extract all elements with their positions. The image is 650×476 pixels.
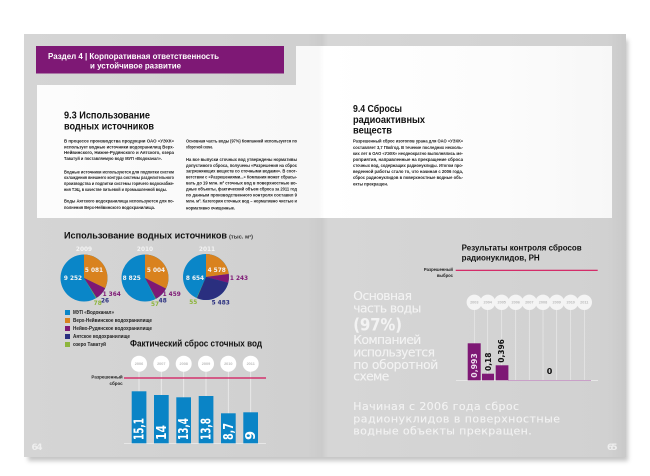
radionuclide bar chart: 2008 <box>539 301 547 305</box>
radionuclide chart heading: Результаты контроля сбросов <box>462 244 582 253</box>
text column 1: Водные источники используются для подпитки систем <box>64 169 174 174</box>
radionuclide bar chart: 0,18 <box>484 352 493 371</box>
wastewater bar chart: 13,8 <box>200 418 214 440</box>
heading 9.3: 9.3 Использование <box>64 110 150 122</box>
text column 1: производства и подпитки системы горячего водоснабже- <box>64 180 174 186</box>
pie legend: Нейво-Рудянское водохранилище <box>73 325 152 332</box>
text column 1 <box>64 139 174 210</box>
radionuclide bar chart: 0,993 <box>470 353 479 378</box>
white top panel <box>37 46 612 218</box>
radionuclide bar chart <box>424 267 598 380</box>
pie chart 2010: 8 825 <box>123 276 141 282</box>
text column 2: вать до 19 млн. м³ сточных вод в поверхностные во- <box>186 181 297 186</box>
pie chart 2010: 48 <box>159 299 167 305</box>
pie chart 2011 <box>183 247 248 306</box>
text column 1: использует водные источники водохранилищ Верх- <box>64 144 174 149</box>
callout: discharge stopped: Начиная с 2006 года сброс <box>353 400 519 413</box>
radionuclide bar chart: 2011 <box>580 301 588 305</box>
wastewater bar chart: 2007 <box>157 362 166 366</box>
water sources heading: Использование водных источников <box>64 230 227 242</box>
callout: discharge stopped: радионуклидов в поверхностные <box>353 412 560 425</box>
wastewater bar chart: 9 <box>244 431 259 440</box>
callout: discharge stopped <box>353 400 560 437</box>
text column 2: допустимого сброса, получены «Разрешения на сброс <box>186 162 297 168</box>
title banner: и устойчивое развитие <box>90 60 181 70</box>
radionuclide bar chart: 2004 <box>483 301 493 305</box>
text 9.4: сточных вод, содержащих радионуклиды. Итогом про- <box>353 163 463 168</box>
pie chart 2009: 1 364 <box>103 292 121 298</box>
heading 9.3 <box>64 110 154 132</box>
callout: 97 percent <box>353 289 438 384</box>
wastewater bar chart: 2008 <box>179 362 188 366</box>
page number 65: 65 <box>607 443 618 453</box>
pie legend: МУП «Водоканал» <box>73 310 114 316</box>
radionuclide bar chart: 2005 <box>497 301 506 305</box>
callout: 97 percent: используется <box>353 345 435 359</box>
pie chart 2011: 5 483 <box>212 300 230 306</box>
callout: 97 percent: (97%) <box>353 316 402 336</box>
text column 1: Нейвинского, Нижне-Рудянского и Аятского, озера <box>64 149 174 155</box>
heading 9.3: водных источников <box>64 122 154 132</box>
wastewater bar chart: Разрешенный <box>91 374 123 380</box>
pie chart 2009 <box>60 247 121 307</box>
wastewater bar chart: 2006 <box>135 362 143 366</box>
radionuclide bar chart: выброс <box>437 273 454 278</box>
radionuclide bar chart: 2010 <box>566 301 575 305</box>
pie chart 2010: 1 459 <box>163 292 181 298</box>
pie chart 2009: 26 <box>101 299 109 305</box>
wastewater bar chart: сброс <box>110 380 123 386</box>
heading 9.4: 9.4 Сбросы <box>353 103 402 115</box>
pie chart 2009: 2009 <box>76 247 92 253</box>
wastewater bar chart: 14 <box>155 425 170 440</box>
title banner: Раздел 4 | Корпоративная ответственность <box>48 51 219 61</box>
callout: 97 percent: часть воды <box>353 302 421 316</box>
radionuclide bar chart: 2009 <box>552 301 561 305</box>
wastewater bar chart <box>91 356 266 444</box>
pie chart 2009: 5 081 <box>85 268 103 274</box>
wastewater bar chart: 2009 <box>202 362 210 366</box>
text 9.4: составляет 3,7 ГБк/год. В течение последних несколь- <box>353 145 463 150</box>
callout: 97 percent: Основная <box>353 289 412 303</box>
text column 1: охлаждения внешнего контура системы разделительного <box>64 175 174 180</box>
pie chart 2010: 5 004 <box>147 268 165 274</box>
text 9.4: ких лет в ОАО «УЭХК» неоднократно выполнялись ме- <box>353 151 463 156</box>
wastewater bar chart: 13,4 <box>177 418 192 440</box>
wastewater bar chart: 2011 <box>247 362 255 366</box>
radionuclide chart heading <box>462 244 582 263</box>
text 9.4: екты прекращен. <box>353 182 388 186</box>
radionuclide bar chart: 0 <box>547 367 553 376</box>
text column 2: загрязняющих веществ со сточными водами». В соот- <box>186 169 297 174</box>
text column 2: по данным производственного контроля составил 9 <box>186 193 297 198</box>
callout: 97 percent: Компанией <box>353 333 421 347</box>
wastewater bar chart: 2010 <box>224 362 233 366</box>
text column 2: ветствии с «Разрешениями...» Компания может сбрасы- <box>186 174 297 180</box>
pie legend <box>65 310 152 348</box>
text 9.4: веденной работы стало то, что начиная с 2006 года, <box>353 168 463 174</box>
radionuclide bar chart: 0,396 <box>497 339 506 363</box>
text 9.4 <box>353 138 463 186</box>
pie legend: Аятское водохранилище <box>73 334 130 340</box>
callout: 97 percent: по оборотной <box>353 358 438 372</box>
text column 1: ния ТЭЦ, в качестве питьевой и промышленной воды. <box>64 186 167 192</box>
pie chart 2011: 1 243 <box>230 276 248 282</box>
text column 1: полнения Верх-Нейвинского водохранилища. <box>64 204 155 210</box>
radionuclide chart heading: радионуклидов, РН <box>462 254 540 263</box>
text 9.4: роприятия, направленные на прекращение сброса <box>353 156 463 162</box>
radionuclide bar chart: 2007 <box>525 301 534 305</box>
heading 9.4: радиоактивных <box>353 115 425 126</box>
radionuclide bar chart: Разрешенный <box>424 267 453 272</box>
text column 1: Воды Аятского водохранилища используются для по- <box>64 199 174 204</box>
page number 64: 64 <box>32 443 42 453</box>
heading 9.4: веществ <box>353 126 392 136</box>
pie chart 2010 <box>122 247 181 308</box>
title banner <box>36 46 284 74</box>
pie legend: озеро Таватуй <box>73 341 106 348</box>
radionuclide bar chart: 2006 <box>511 301 520 305</box>
text column 2: нормативно очищенные. <box>186 205 235 210</box>
pie chart 2011: 55 <box>189 300 197 306</box>
text column 2: оборотной схеме. <box>186 143 213 149</box>
pie chart 2010: 57 <box>151 302 159 308</box>
wastewater bar chart: 15,1 <box>132 418 148 440</box>
text column 1: В процессе производства продукции ОАО «УЭХК» <box>64 139 174 144</box>
radionuclide bar chart: 2003 <box>470 301 479 305</box>
pie chart 2011: 2011 <box>199 247 215 253</box>
text column 2 <box>186 138 297 210</box>
pie chart 2010: 2010 <box>137 247 153 253</box>
wastewater chart heading: Фактический сброс сточных вод <box>130 338 262 348</box>
text column 2: На все выпуски сточных вод утверждены нормативы <box>186 157 297 162</box>
callout: discharge stopped: водные объекты прекращен. <box>353 424 532 437</box>
wastewater bar chart: 8,7 <box>222 423 237 440</box>
callout: 97 percent: схеме <box>353 370 389 384</box>
pie legend: Верх-Нейвинское водохранилище <box>73 317 152 324</box>
text column 2: Основная часть воды (97%) Компанией используется по <box>186 138 297 144</box>
pie chart 2009: 78 <box>94 301 102 307</box>
text column 2: дные объекты, фактический объем сброса за 2011 год <box>186 186 297 192</box>
pie chart 2011: 8 654 <box>186 276 204 282</box>
text column 1: Таватуй и поставляемую воду МУП «Водоканал». <box>64 155 162 161</box>
pie chart 2009: 9 252 <box>64 276 82 282</box>
text 9.4: сброс радионуклидов в поверхностные водные объ- <box>353 174 463 180</box>
water sources heading: (тыс. м³) <box>229 234 253 240</box>
heading 9.4 <box>353 103 425 136</box>
text 9.4: Разрешенный сброс изотопов урана для ОАО «УЭХК» <box>353 138 463 144</box>
pie chart 2011: 4 578 <box>208 268 226 274</box>
text column 2: млн. м³. Категория сточных вод – нормативно чистые и <box>186 199 297 204</box>
